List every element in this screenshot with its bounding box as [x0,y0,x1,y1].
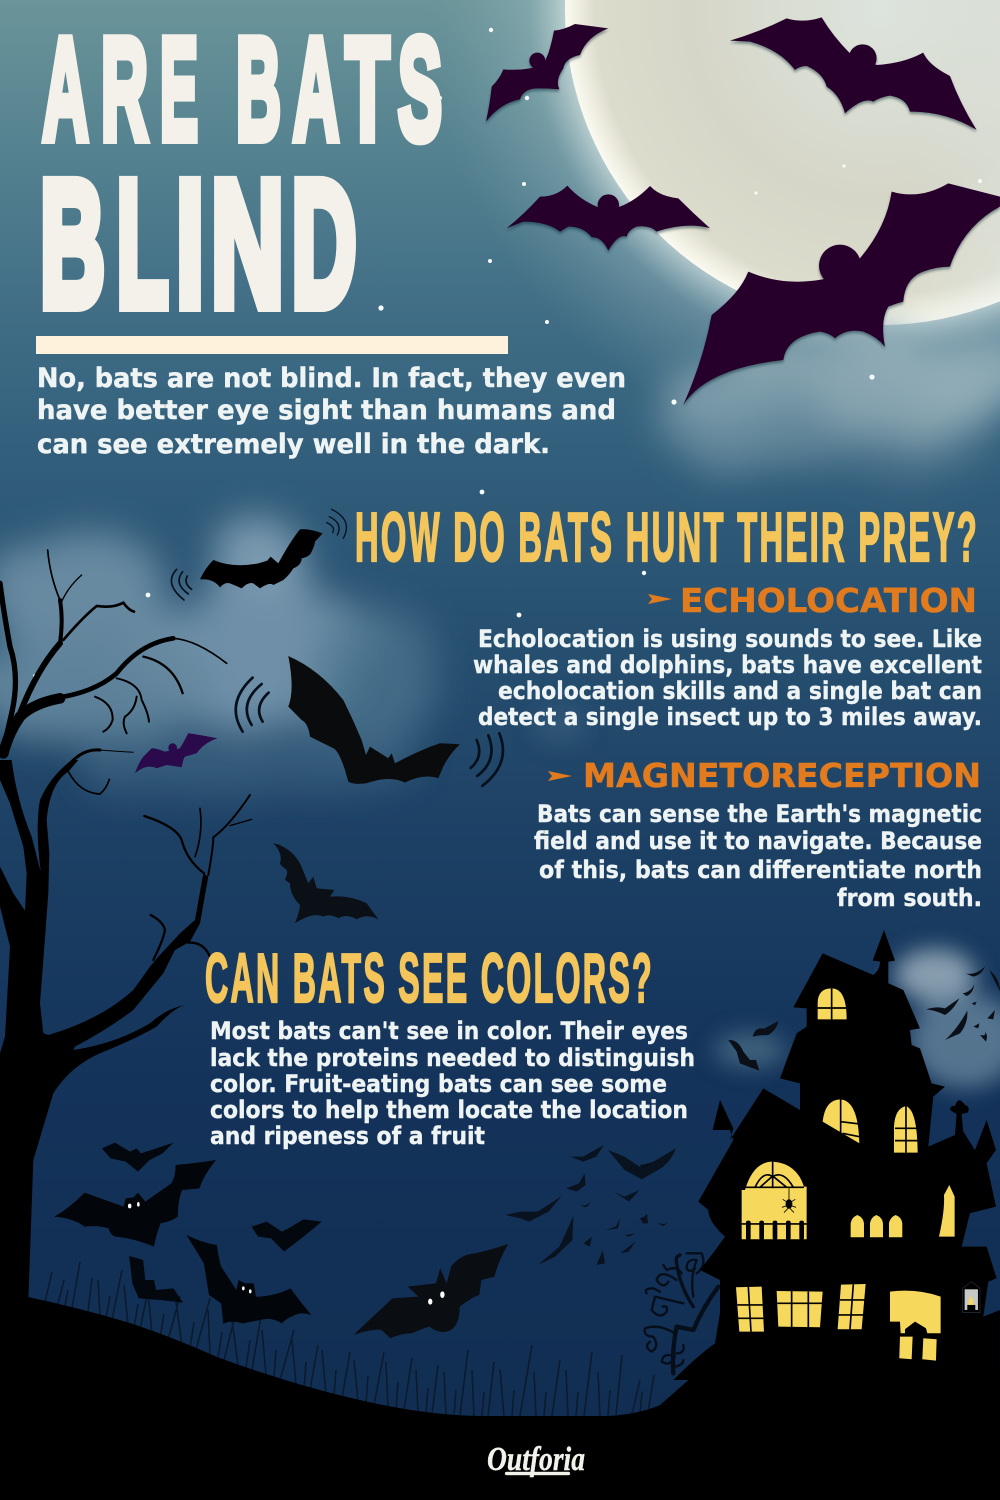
colors text [210,1017,695,1150]
spiral tree by the house [645,1253,718,1373]
lower echo bat [273,843,378,923]
sound waves right [327,509,346,538]
clouds under the moon [650,330,1000,475]
house silhouette [673,930,1000,1380]
colors text: and ripeness of a fruit [210,1122,485,1150]
intro text: have better eye sight than humans and [37,395,616,426]
title: B [236,8,281,170]
sound waves right [471,733,503,786]
title: R [101,8,148,170]
subheading: echolocation: ECHOLOCATION [680,581,977,620]
grass [45,1262,654,1416]
distant bats [505,1145,676,1265]
title: L [116,144,168,344]
title: B [40,144,105,344]
lantern [963,1282,980,1313]
bat [129,1256,183,1303]
intro text: No, bats are not blind. In fact, they even [37,363,626,394]
magnetoreception text: from south. [837,884,982,912]
bat silhouette [200,529,323,588]
full moon [565,0,1000,325]
title: A [293,8,339,170]
sound waves left [236,678,269,732]
title: A [42,8,88,170]
title divider bar [36,336,508,354]
tree [0,550,252,1300]
clouds behind the left bats [0,522,445,794]
magnetoreception text [534,800,982,912]
upper tree branches [0,550,227,770]
logo: Outforia [487,1441,585,1478]
colors text: colors to help them locate the location [210,1096,688,1124]
title: N [211,144,284,344]
title [40,8,442,344]
small clouds near the house [532,705,1000,1088]
moon glow [300,0,1000,480]
purple bat [135,733,217,773]
subheading: magnetoreception: MAGNETORECEPTION [583,756,981,795]
top-right moon bat [730,17,977,130]
haunted house [673,930,1000,1380]
echo bat large [236,656,503,786]
title: D [292,144,356,344]
bottom bats flock [54,1143,676,1338]
lower tree branches [68,772,252,960]
stars [33,28,982,678]
bat [252,1219,322,1252]
large foreground moon bat [683,183,1000,405]
bat with eyes [353,1244,508,1338]
echolocation text [473,625,982,731]
bat with eyes [54,1160,216,1247]
title: T [346,8,390,170]
title: I [176,144,204,344]
top-left moon bat [486,24,608,122]
spider [782,1188,796,1213]
bats right of the house [640,967,1000,1225]
balcony balusters [746,1221,804,1240]
bat silhouette [288,656,460,784]
colors text: Most bats can't see in color. Their eyes [210,1017,688,1045]
bat [102,1143,173,1172]
tree trunk [0,760,208,1300]
colors text: lack the proteins needed to distinguish [210,1044,695,1072]
middle moon bat [507,186,710,251]
windows [736,988,955,1361]
title: E [160,8,198,170]
ground hill [0,1290,1000,1500]
intro text [37,363,626,460]
text: S [398,8,442,170]
colors text: color. Fruit-eating bats can see some [210,1070,667,1098]
intro text: can see extremely well in the dark. [37,429,550,460]
bat with eyes [186,1235,311,1324]
echo bat top [171,509,346,600]
window panes [737,988,918,1332]
sound waves left [171,569,192,600]
